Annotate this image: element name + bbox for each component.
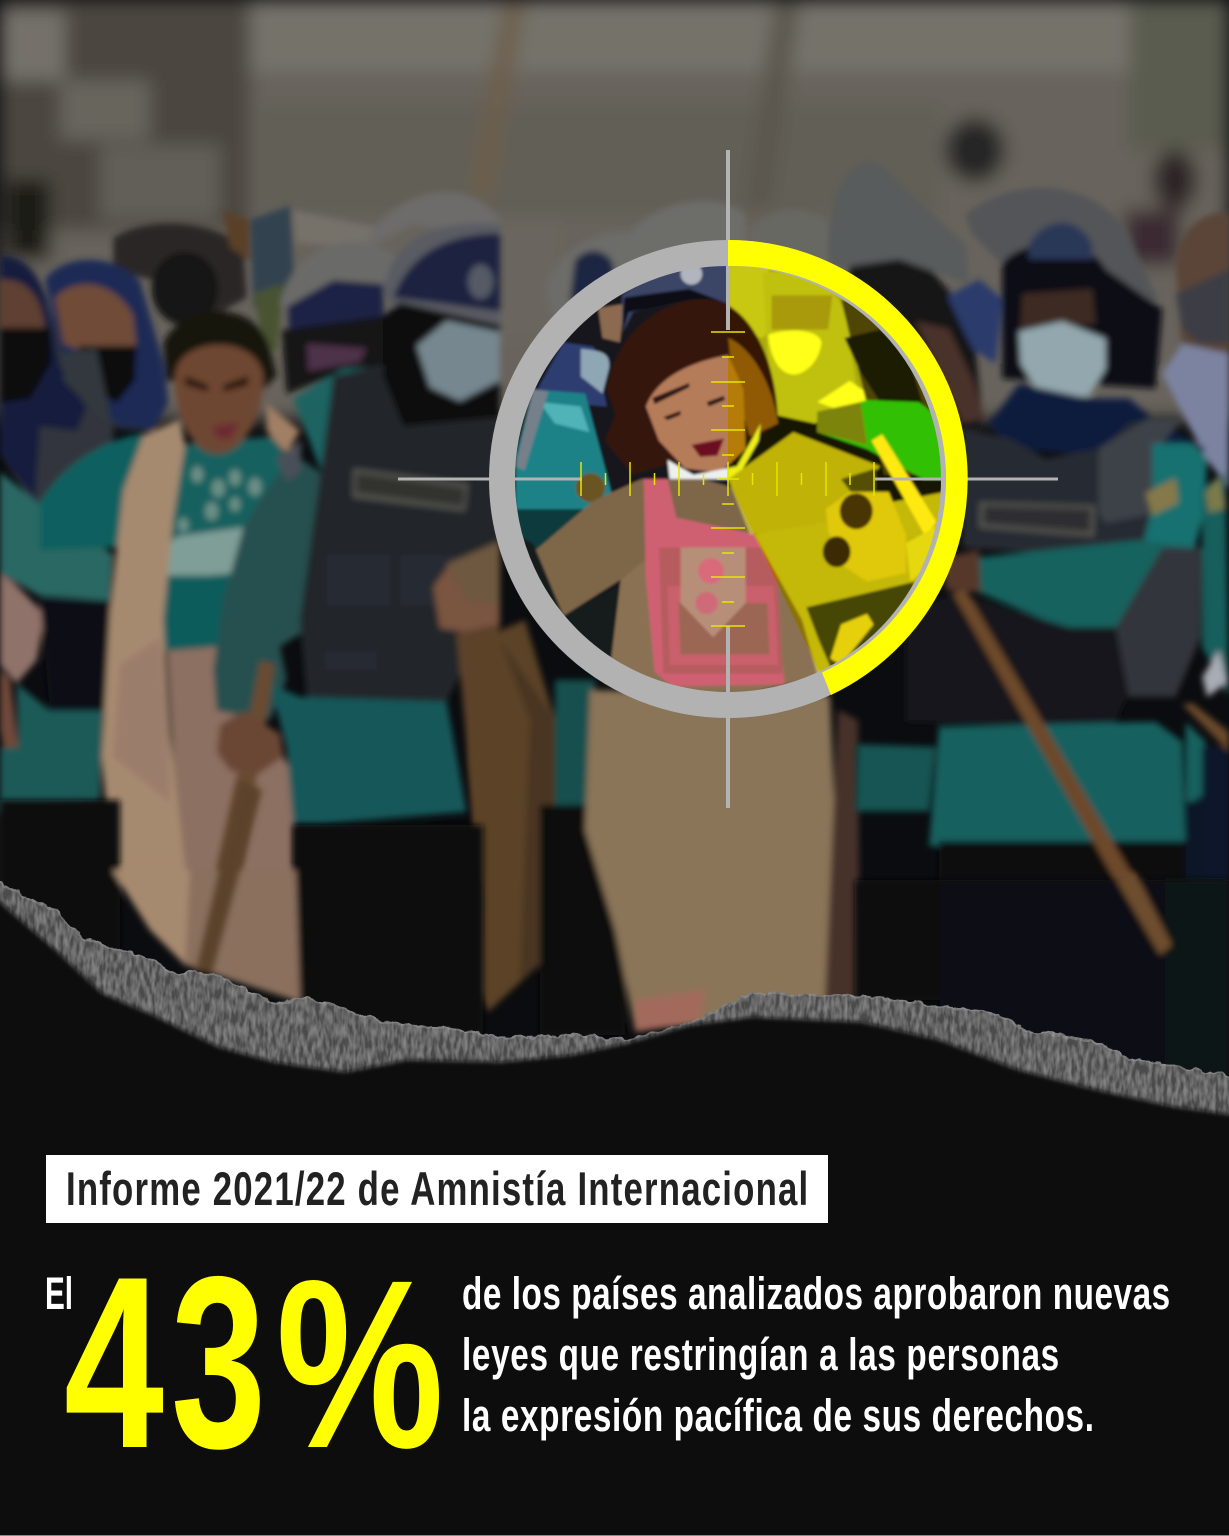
scope ring: grey share [502, 253, 954, 705]
woman hair and face [605, 299, 778, 475]
statistic description: la expresión pacífica de sus derechos. [462, 1391, 1094, 1441]
dress and scarf [609, 533, 818, 692]
statistic description: de los países analizados aprobaron nuevas [462, 1269, 1170, 1319]
right side of dress and yellow shawl [754, 490, 941, 673]
batons [952, 590, 1136, 881]
lower left teal officer [0, 472, 113, 601]
person with navy hijab and black mask [0, 256, 113, 509]
teal arm of officer [515, 388, 613, 511]
distant dark head and blue sign [113, 223, 247, 316]
left side figures [0, 192, 500, 904]
centre figures [470, 201, 860, 1035]
right side figures [829, 163, 1229, 881]
report label text: Informe 2021/22 de Amnistía Internacional [66, 1163, 808, 1215]
vest [300, 364, 500, 702]
bamboo stick and gloves [871, 434, 936, 537]
helmet stack [367, 192, 500, 247]
scope crosshair lines [398, 150, 1058, 808]
man with black mask [840, 299, 930, 476]
statistic description [462, 1269, 1170, 1441]
officer shield and helmet [966, 188, 1157, 309]
officer right sleeve and arm [1142, 443, 1207, 558]
lower teal shirts and trousers [929, 722, 1186, 846]
lower vest [906, 593, 1162, 727]
officer behind with pink mask [280, 242, 397, 316]
teal arm across woman [40, 433, 167, 550]
brown scarf hanging [470, 620, 560, 1012]
background photo: riot police line, darkened [0, 0, 1229, 1100]
woman scarf [102, 419, 187, 881]
far sleeve [1202, 473, 1229, 697]
blurred street and buildings [0, 0, 1229, 420]
trousers and lower right baton [0, 780, 1229, 1080]
right man with mask and check shirt [1176, 212, 1229, 354]
bottom edge hairline [0, 1535, 1229, 1536]
navy helmet [622, 265, 728, 334]
second man behind shield [849, 234, 982, 478]
statistic description: leyes que restringían a las personas [462, 1330, 1059, 1380]
yellow half of lens [728, 260, 947, 677]
person with blue hijab [45, 260, 168, 431]
big statistic: 3 [171, 1225, 266, 1499]
vest [962, 418, 1162, 558]
torn paper: black panel [0, 885, 1229, 1536]
yellow scope tick marks [581, 332, 874, 626]
woman top [160, 435, 283, 578]
big statistic: % [276, 1230, 444, 1498]
torn paper: grey ripped edge [0, 878, 1229, 1140]
officer behind woman [608, 344, 625, 400]
woman skirt [167, 647, 293, 881]
centre woman dress [585, 690, 842, 1030]
hand, baton and lower teal [270, 683, 467, 826]
report label box [46, 1155, 828, 1223]
pale officer, helmet and background [725, 270, 865, 391]
woman head [163, 311, 277, 390]
big statistic [64, 1225, 444, 1499]
scope lens: sharpened photo of woman inside the circle [515, 266, 941, 692]
scope ring: yellow 43 percent arc [728, 240, 968, 695]
intro word: El [45, 1269, 73, 1320]
embroidered panel [644, 479, 785, 686]
big statistic: 4 [64, 1225, 164, 1499]
officer arm and collar [293, 367, 403, 477]
